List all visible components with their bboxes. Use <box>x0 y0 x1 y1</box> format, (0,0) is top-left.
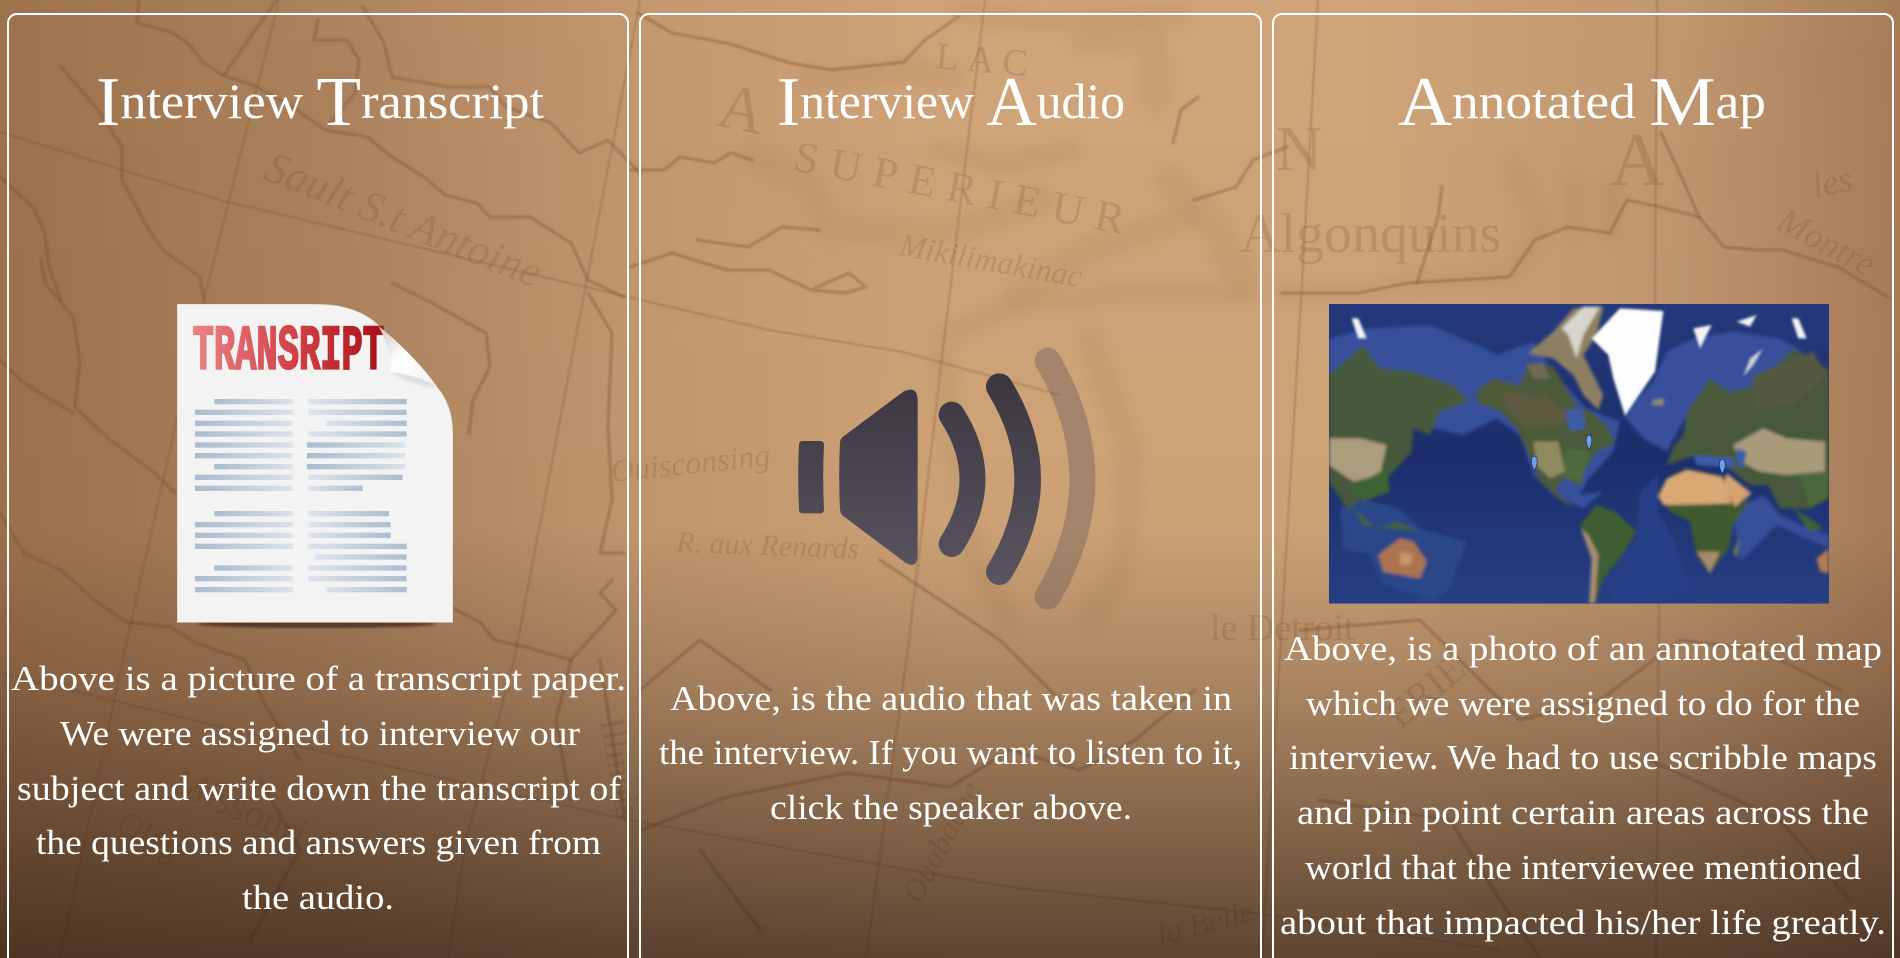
text: map description: Above, is a photo of an annotated map <box>1284 629 1882 668</box>
text: transcript description: Above is a picture of a transcript paper. <box>11 659 626 698</box>
background: antique map: Missouri <box>166 757 315 856</box>
icon: transcript paper: TRANSRIPT <box>193 316 384 388</box>
text: map description: world that the interviewee mentioned <box>1305 848 1862 887</box>
panel: interview transcript <box>8 14 628 958</box>
background: antique map: Olag <box>111 804 187 868</box>
heading: annotated map: A <box>1398 64 1452 141</box>
background: antique map: N <box>1276 113 1322 184</box>
heading: annotated map: M <box>1649 64 1716 141</box>
panel border <box>8 14 628 958</box>
background: antique map: Sault S.t Antoine <box>258 142 549 297</box>
panel: interview audio <box>640 14 1261 958</box>
background: antique map: Mikilimakinac <box>896 226 1085 294</box>
text: transcript description: We were assigned to interview our <box>60 714 580 753</box>
background: antique map: Ouabache <box>894 775 988 908</box>
heading: interview transcript: nterview <box>120 73 316 129</box>
heading: interview audio: A <box>986 64 1037 141</box>
text: transcript description: the audio. <box>242 878 394 917</box>
text: map description: and pin point certain areas across the <box>1297 793 1869 832</box>
heading: interview audio: I <box>777 64 800 141</box>
background: antique map: la Belle <box>1153 893 1257 952</box>
icon: speaker <box>798 361 1082 597</box>
heading: interview transcript: T <box>316 64 361 141</box>
background: antique map: A <box>1610 118 1665 202</box>
heading: interview transcript: I <box>96 64 120 141</box>
background: antique map: Montre <box>1770 199 1882 284</box>
heading: interview audio: udio <box>1037 73 1125 129</box>
background: antique map: A <box>712 69 772 148</box>
panel border <box>1273 14 1893 958</box>
text: audio description <box>659 679 1242 827</box>
heading: annotated map: ap <box>1716 73 1766 129</box>
background: antique map: R. aux Renards <box>675 526 860 565</box>
text: map description: which we were assigned to do for the <box>1306 684 1860 723</box>
background: antique map: Algonquins <box>1240 203 1501 265</box>
text: map description <box>1280 629 1886 942</box>
text: audio description: Above, is the audio that was taken in <box>670 679 1232 718</box>
background: antique map: Illinois <box>592 714 649 822</box>
heading: interview transcript: ranscript <box>361 73 544 129</box>
text: transcript description: the questions and answers given from <box>36 823 601 862</box>
text: audio description: click the speaker above. <box>770 788 1132 827</box>
text: transcript description <box>11 659 626 917</box>
map pins <box>1531 435 1725 474</box>
background: antique map: les <box>1808 158 1856 206</box>
background: antique map: SUPERIEUR <box>790 132 1141 246</box>
text: transcript description: subject and write down the transcript of <box>17 769 621 808</box>
text: audio description: the interview. If you want to listen to it, <box>659 733 1242 772</box>
panel border <box>640 14 1261 958</box>
world map image <box>1329 304 1829 604</box>
panel: annotated map <box>1273 14 1893 958</box>
heading: annotated map: nnotated <box>1452 73 1649 129</box>
background: antique map: ERIE <box>1377 645 1474 737</box>
background: antique map: Ouisconsing <box>609 436 772 489</box>
heading: interview audio: nterview <box>800 73 986 129</box>
text: map description: interview. We had to use scribble maps <box>1289 738 1877 777</box>
text: map description: about that impacted his/her life greatly. <box>1280 903 1886 942</box>
background: antique map: le Detroit <box>1210 607 1355 649</box>
background: antique map: LAC <box>934 35 1037 86</box>
icon: transcript paper <box>177 304 453 628</box>
